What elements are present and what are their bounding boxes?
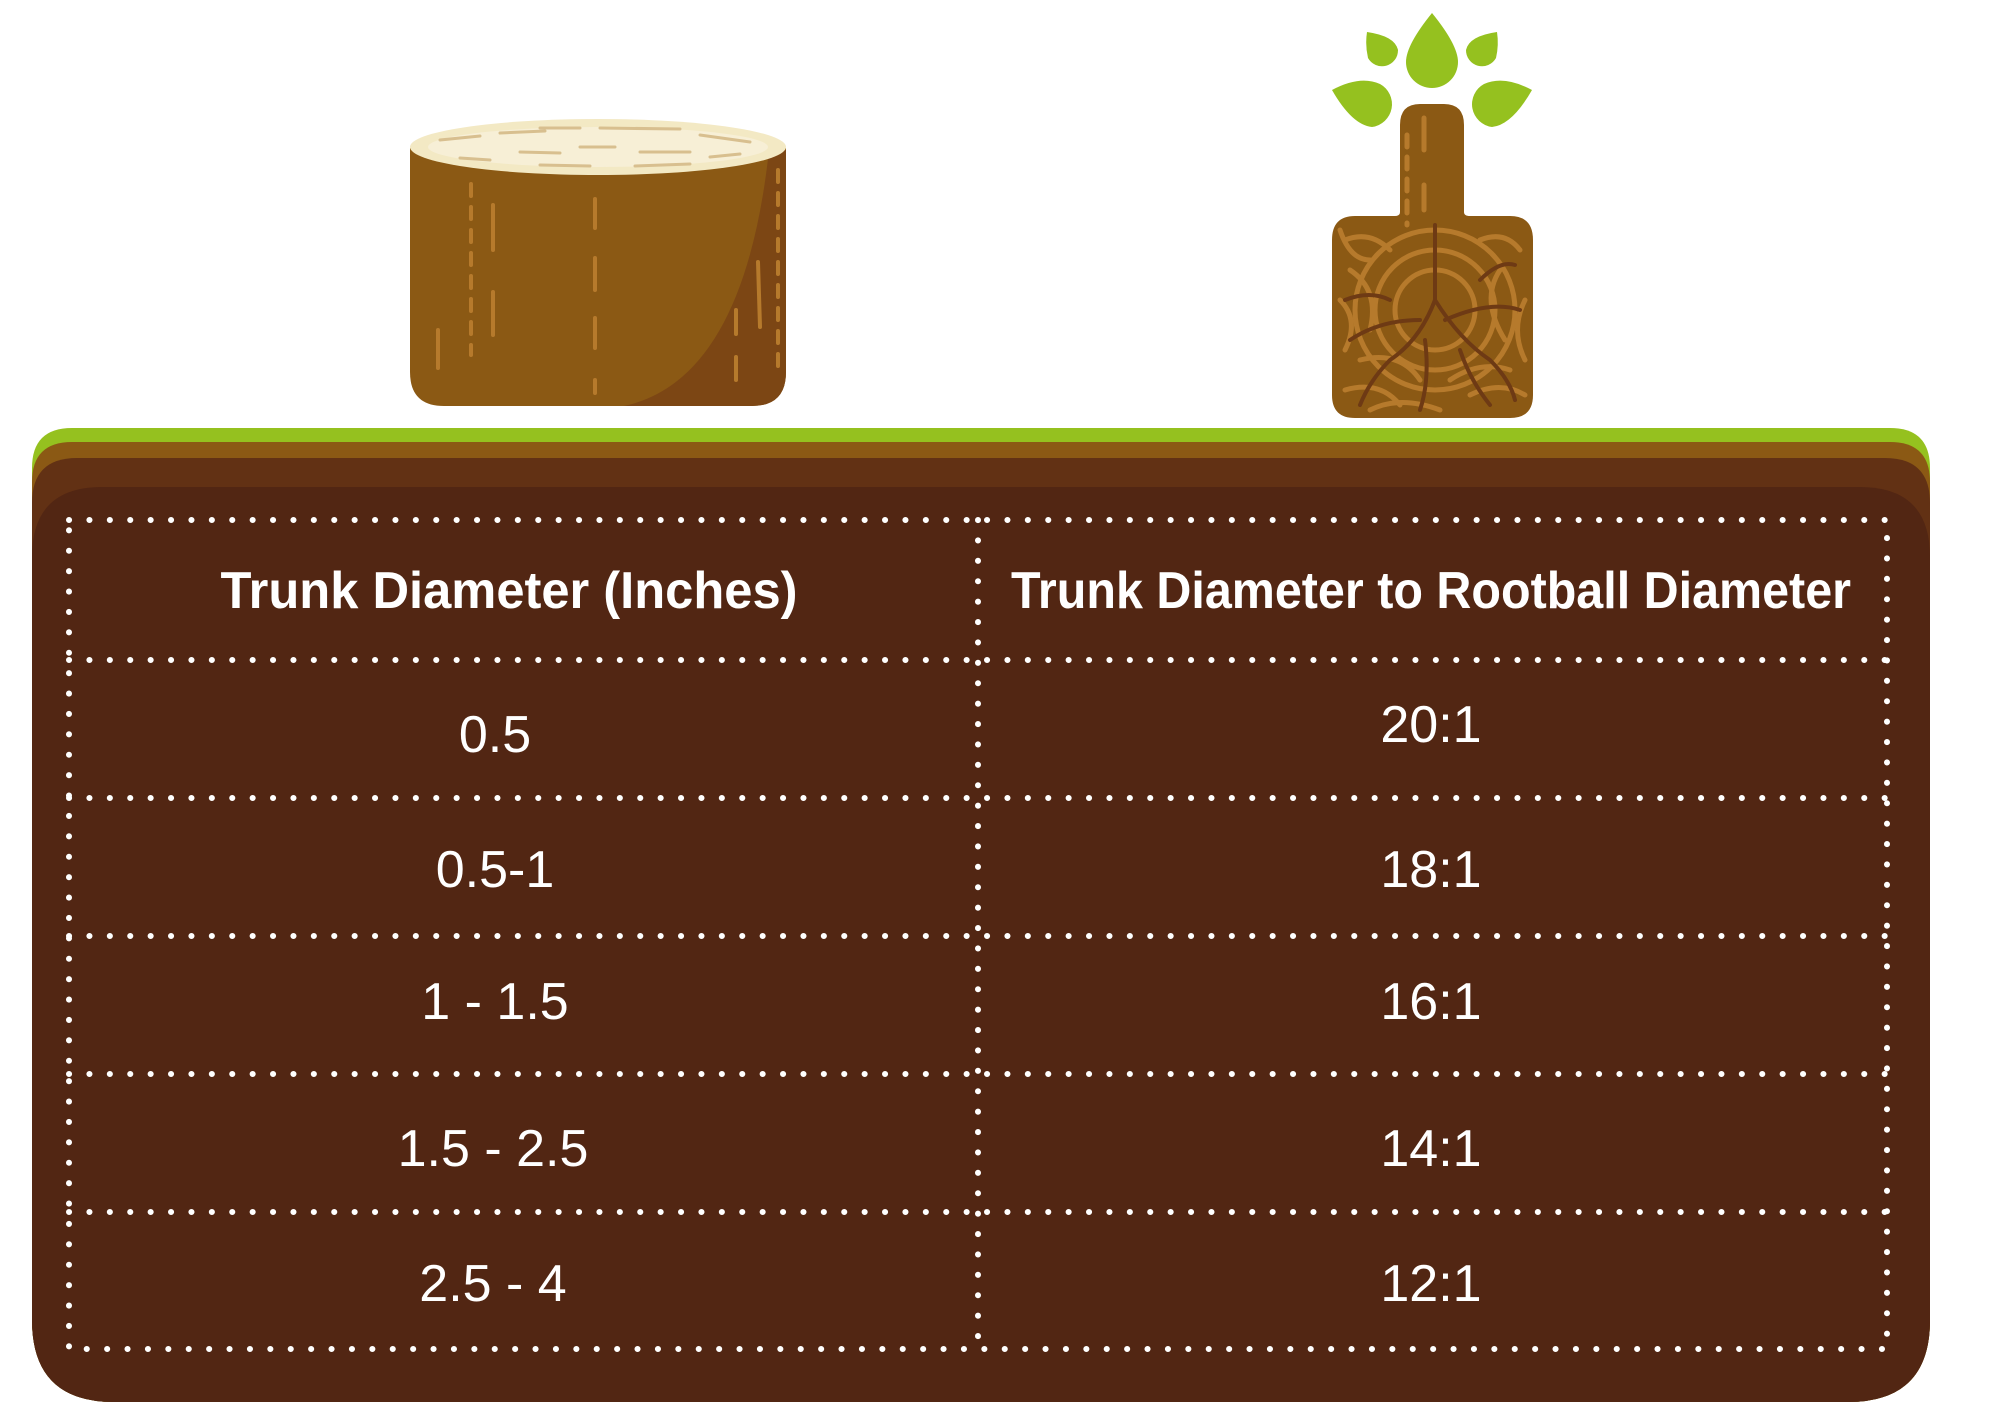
- table rows: 0.5: [459, 706, 531, 764]
- table rows: 0.5-1: [436, 841, 554, 899]
- icon: tree stump: [410, 119, 786, 406]
- table rows: 2.5 - 4: [419, 1255, 567, 1313]
- table rows: 18:1: [1380, 841, 1482, 899]
- table rows: 14:1: [1380, 1120, 1482, 1178]
- table rows: 12:1: [1380, 1255, 1482, 1313]
- panel: ground table: [32, 428, 1930, 1402]
- icon: sapling with rootball: [1332, 13, 1533, 418]
- table rows: [398, 696, 1482, 1313]
- table rows: 20:1: [1380, 696, 1482, 754]
- leaves: [1332, 13, 1532, 127]
- table rows: 16:1: [1380, 973, 1482, 1031]
- table header: Trunk Diameter to Rootball Diameter: [1011, 562, 1851, 620]
- table rows: 1.5 - 2.5: [398, 1120, 588, 1178]
- table rows: 1 - 1.5: [421, 973, 569, 1031]
- table header: Trunk Diameter (Inches): [220, 562, 798, 620]
- table header: [220, 562, 1851, 620]
